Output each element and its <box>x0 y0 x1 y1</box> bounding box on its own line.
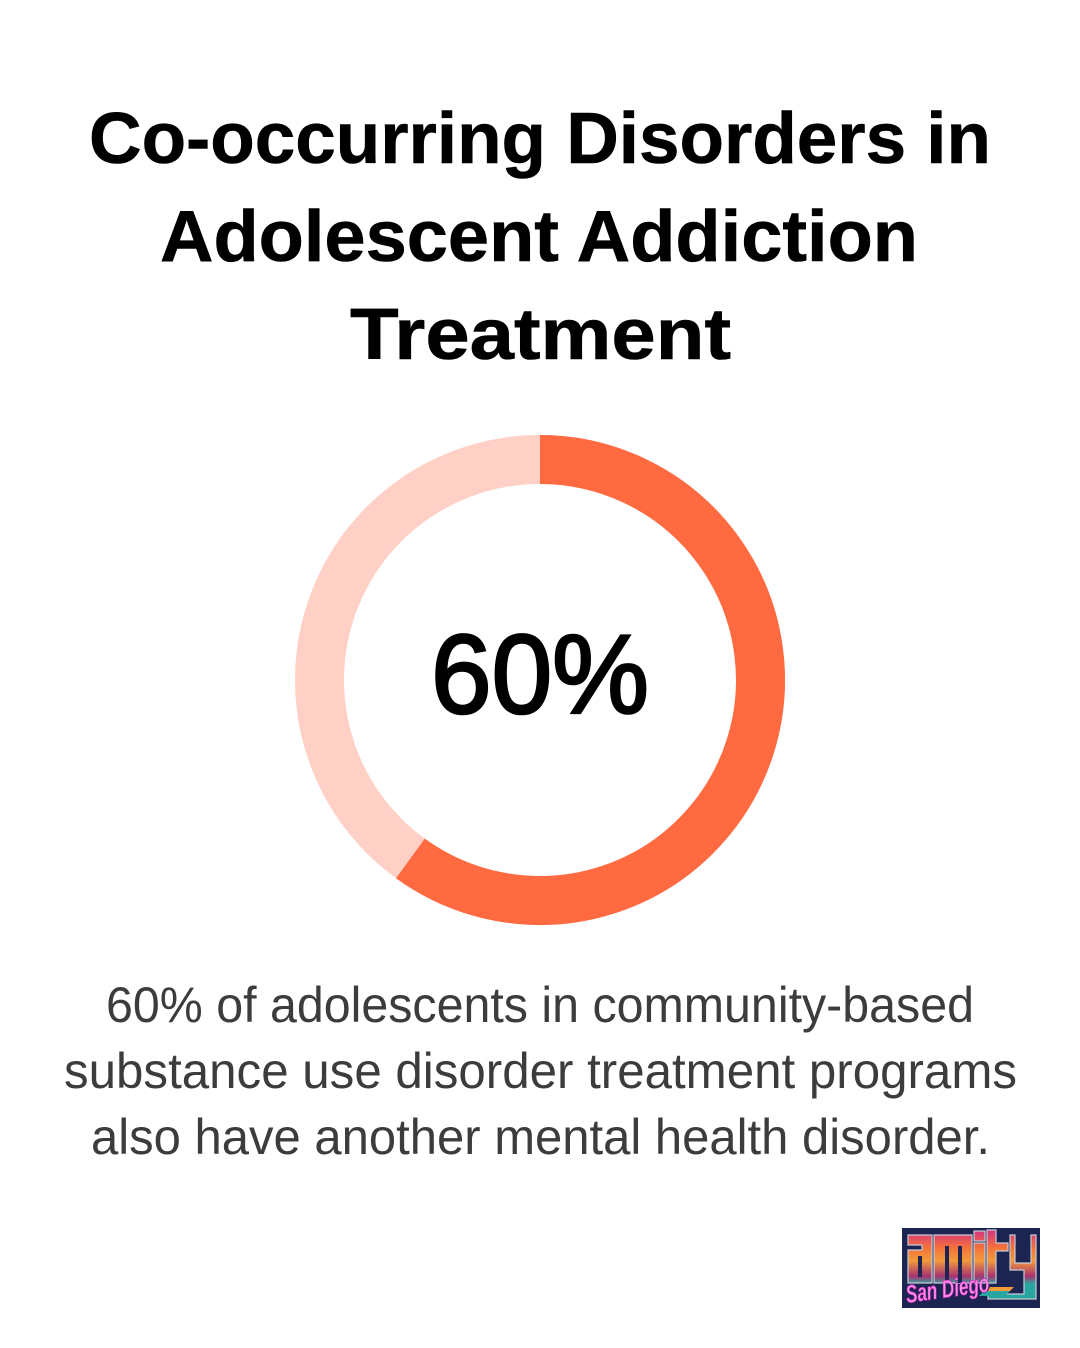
title <box>89 99 991 375</box>
description text: substance use disorder treatment programs <box>64 1043 1017 1099</box>
title: Treatment <box>350 295 731 375</box>
description text <box>64 977 1017 1165</box>
donut chart: 60% <box>320 460 760 900</box>
description text: 60% of adolescents in community-based <box>106 977 974 1033</box>
title: Adolescent Addiction <box>160 197 918 277</box>
description text: also have another mental health disorder. <box>91 1109 990 1165</box>
logo wordmark detail <box>918 1246 962 1283</box>
logo: Amity San Diego <box>902 1228 1040 1309</box>
logo script text: San Diego <box>904 1270 991 1309</box>
logo beach stripes <box>979 1287 1014 1296</box>
logo wordmark <box>908 1230 1036 1299</box>
title: Co-occurring Disorders in <box>89 99 991 179</box>
donut value: 60% <box>431 612 649 737</box>
